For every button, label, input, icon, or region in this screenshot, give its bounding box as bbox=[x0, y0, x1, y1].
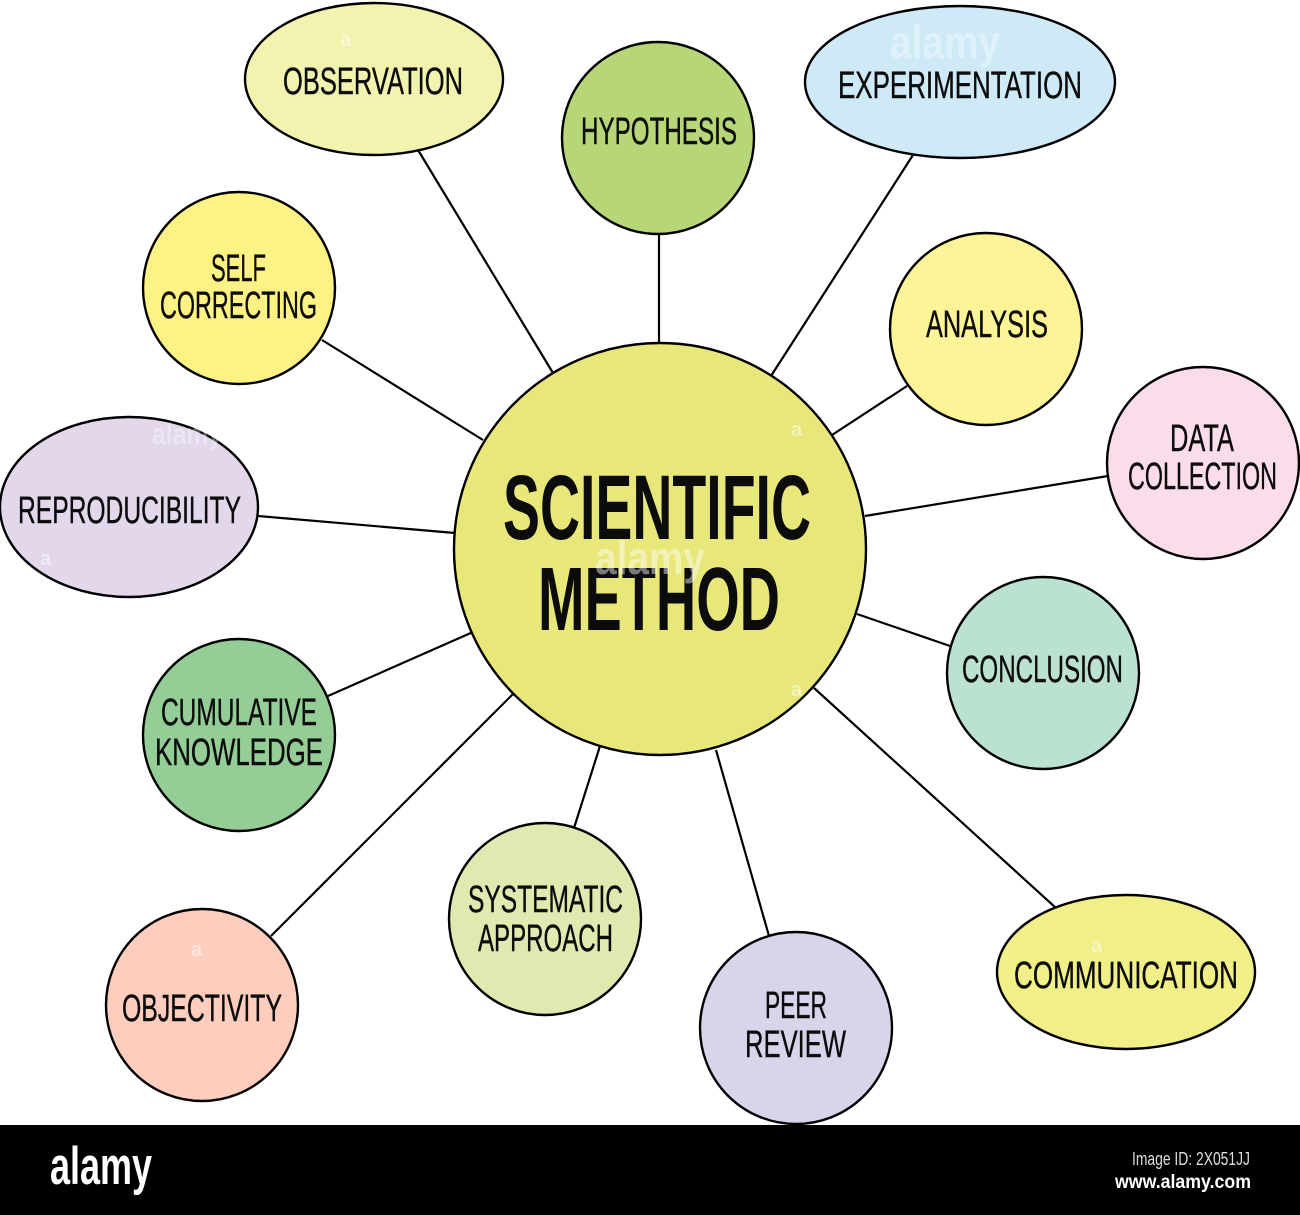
node: hypothesis bbox=[562, 42, 754, 234]
node: peer review: REVIEW bbox=[745, 1024, 846, 1066]
node: peer review: PEER bbox=[765, 985, 827, 1027]
node: observation: a bbox=[340, 29, 352, 51]
node: cumulative knowledge: KNOWLEDGE bbox=[155, 732, 323, 774]
node: hypothesis: HYPOTHESIS bbox=[581, 111, 737, 153]
footer bar: www.alamy.com bbox=[1114, 1172, 1251, 1193]
node: objectivity bbox=[106, 909, 298, 1101]
node: experimentation bbox=[805, 6, 1115, 158]
node: self correcting: CORRECTING bbox=[160, 285, 317, 327]
node: data collection bbox=[1107, 367, 1299, 559]
node: objectivity: a bbox=[191, 939, 203, 961]
footer bar: Image ID: 2X051JJ bbox=[1132, 1149, 1250, 1169]
node: reproducibility: alamy bbox=[152, 418, 222, 451]
node: peer review bbox=[700, 932, 892, 1124]
central node: scientific method bbox=[454, 343, 866, 755]
node: reproducibility: a bbox=[40, 548, 52, 570]
connector lines bbox=[258, 150, 1108, 936]
node: data collection: DATA bbox=[1170, 418, 1234, 460]
node: systematic approach: APPROACH bbox=[478, 918, 613, 960]
node: reproducibility: REPRODUCIBILITY bbox=[18, 490, 241, 532]
node: objectivity: OBJECTIVITY bbox=[122, 988, 282, 1030]
central node: scientific method: a bbox=[791, 679, 803, 701]
node: cumulative knowledge bbox=[143, 639, 335, 831]
node: observation: OBSERVATION bbox=[283, 61, 463, 103]
node: communication: a bbox=[1091, 935, 1103, 957]
node: communication bbox=[997, 895, 1255, 1049]
node: self correcting bbox=[143, 192, 335, 384]
node: analysis: ANALYSIS bbox=[926, 304, 1048, 346]
node: conclusion bbox=[947, 577, 1139, 769]
node: analysis bbox=[890, 233, 1082, 425]
central node: scientific method: alamy bbox=[595, 532, 705, 584]
node: conclusion: CONCLUSION bbox=[962, 649, 1123, 691]
node: reproducibility bbox=[0, 417, 258, 597]
central node: scientific method: a bbox=[791, 419, 803, 441]
node: experimentation: EXPERIMENTATION bbox=[838, 65, 1082, 107]
node: experimentation: alamy bbox=[890, 16, 1000, 68]
central node: scientific method: METHOD bbox=[538, 550, 780, 650]
node: self correcting: SELF bbox=[211, 248, 266, 290]
node: systematic approach bbox=[449, 823, 641, 1015]
node: cumulative knowledge: CUMULATIVE bbox=[161, 692, 317, 734]
central node: scientific method: SCIENTIFIC bbox=[503, 457, 811, 559]
node: systematic approach: SYSTEMATIC bbox=[468, 879, 623, 921]
node: observation bbox=[245, 3, 503, 155]
footer bar: alamy bbox=[50, 1137, 152, 1196]
footer bar bbox=[0, 1125, 1300, 1215]
